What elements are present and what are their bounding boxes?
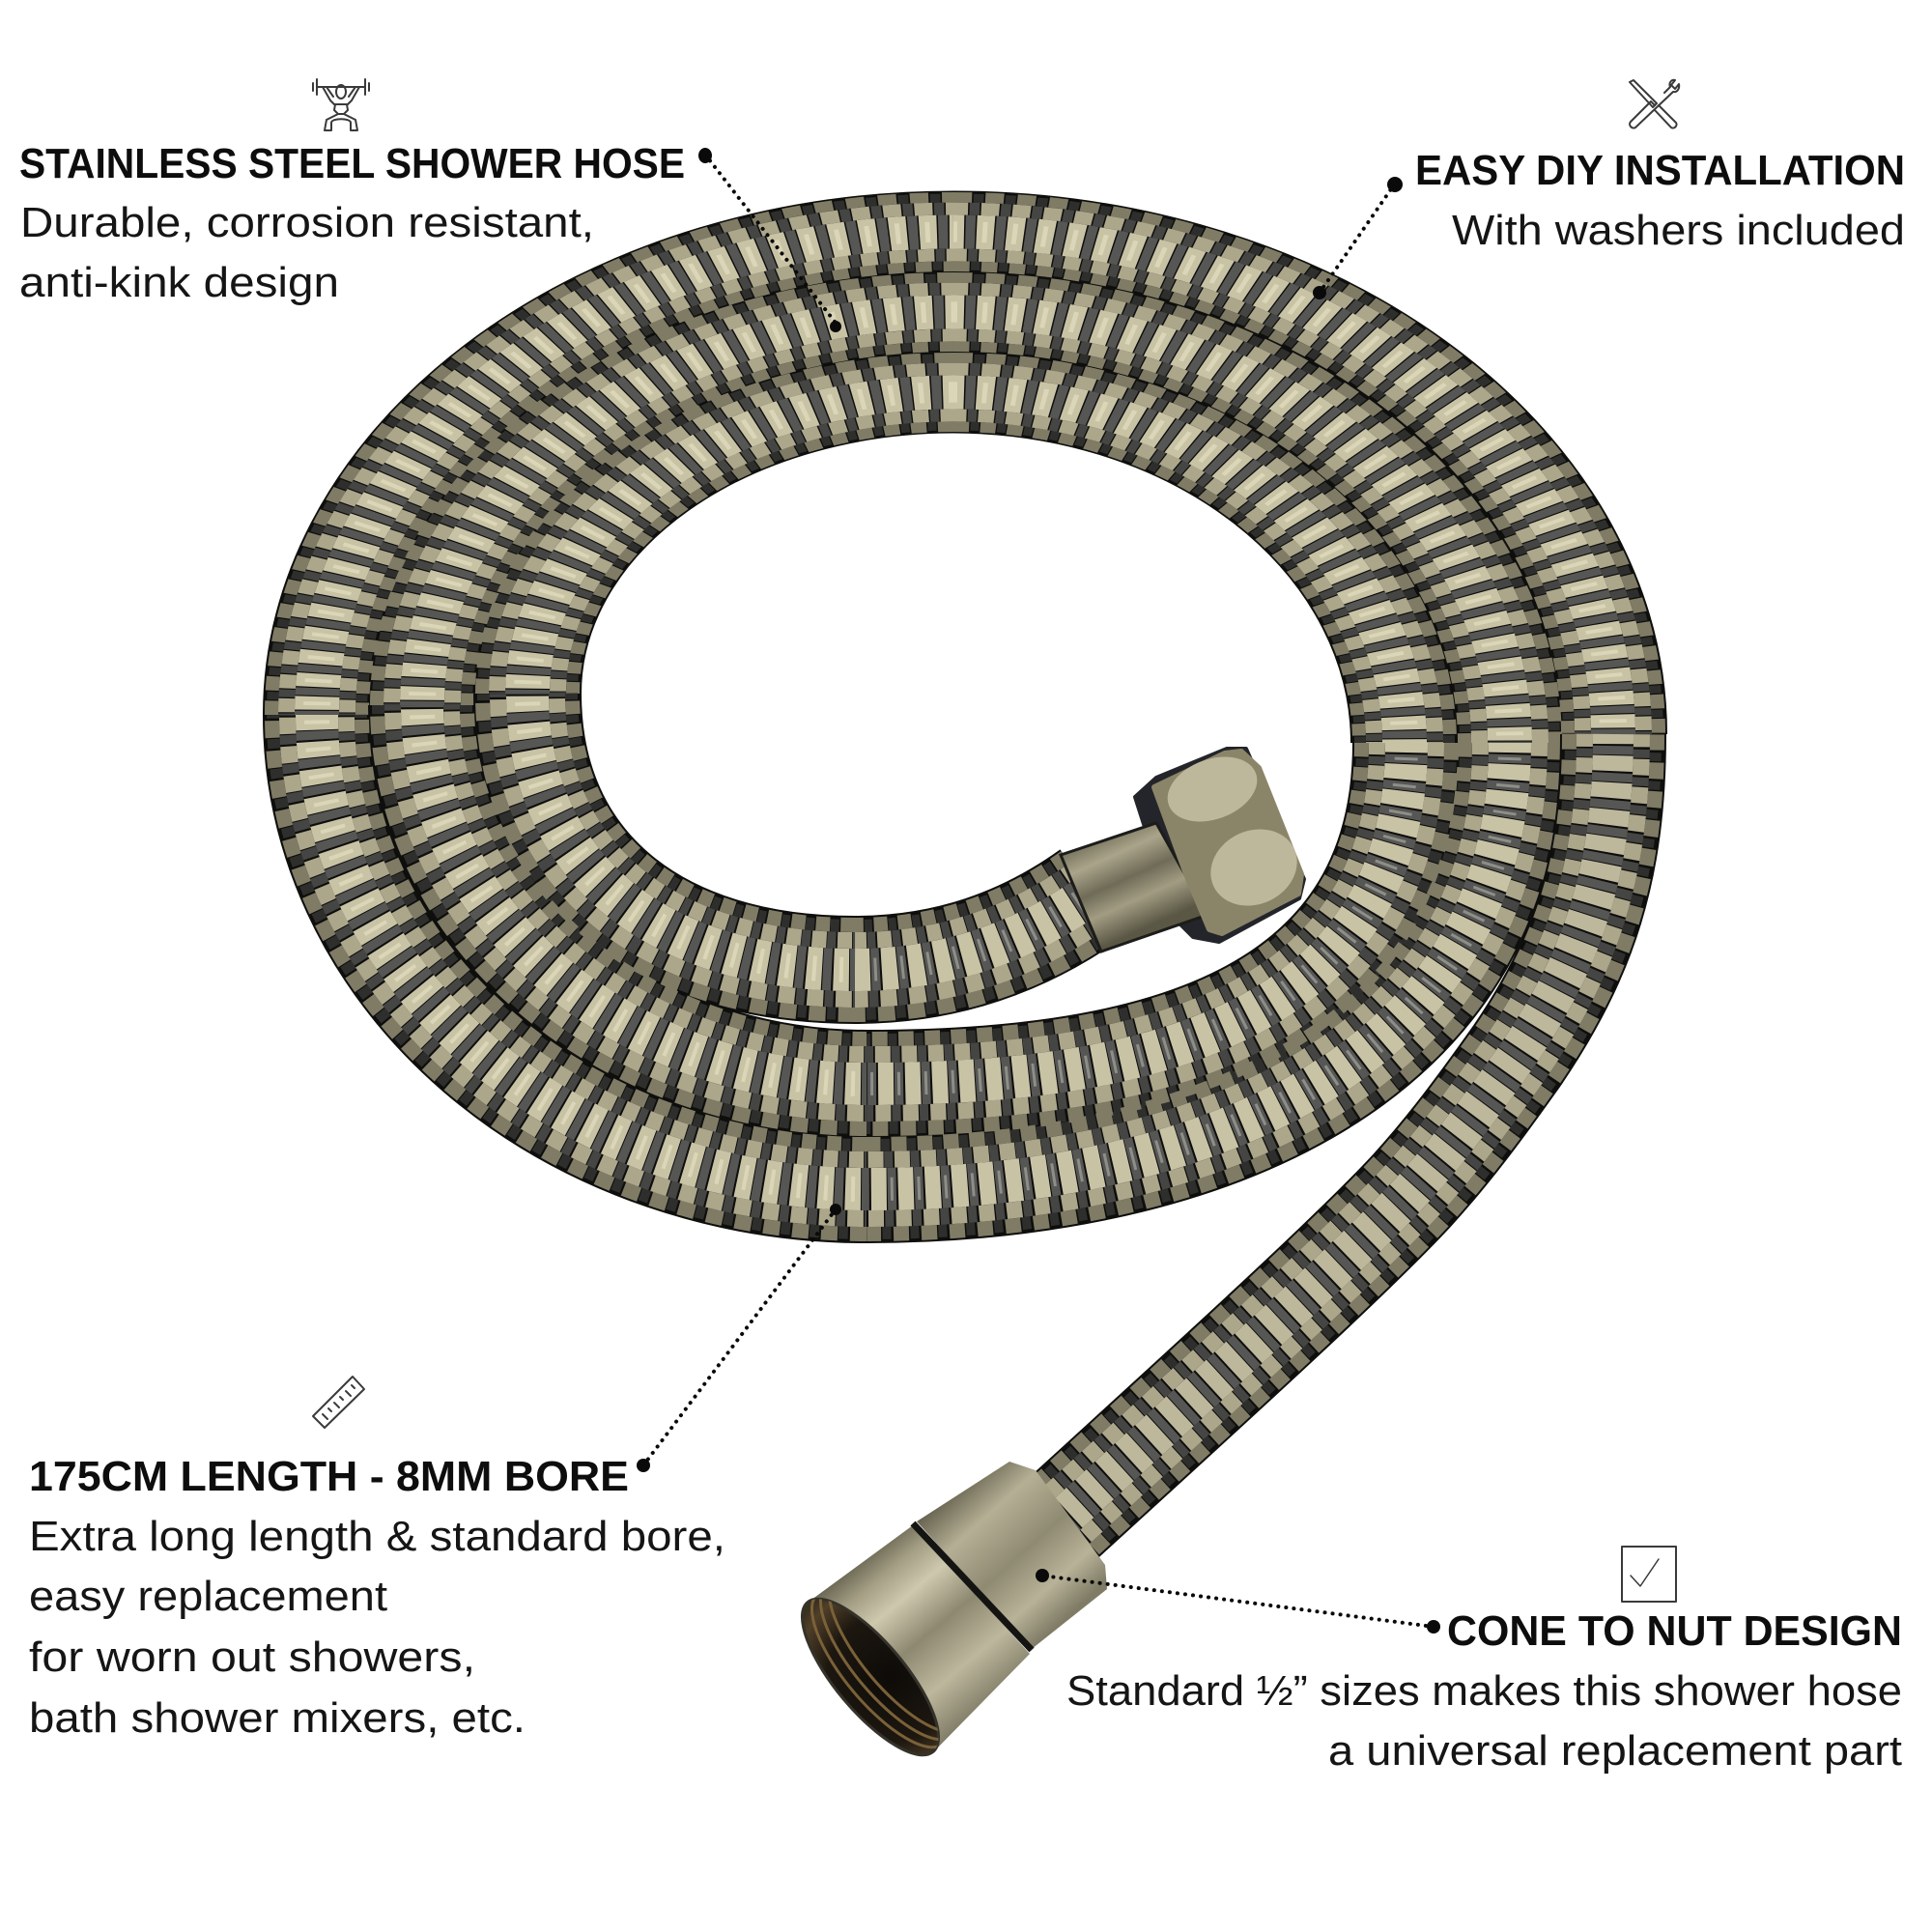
- description: easy replacement: [29, 1573, 387, 1620]
- nut body: [1154, 752, 1301, 933]
- description: [29, 1513, 725, 1742]
- icon: checkbox: [1622, 1547, 1676, 1602]
- heading: 175CM LENGTH - 8MM BORE: [29, 1453, 629, 1500]
- icon: crossed wrench and screwdriver: [1630, 80, 1679, 128]
- callout: cone to nut design: [1036, 1547, 1902, 1775]
- leader line: [637, 1204, 841, 1472]
- description: [19, 199, 594, 306]
- collar: [1061, 823, 1208, 952]
- description: Durable, corrosion resistant,: [20, 199, 594, 246]
- hose coil upper right: [953, 232, 1613, 743]
- leader line: [1313, 177, 1403, 299]
- heading: EASY DIY INSTALLATION: [1415, 147, 1905, 194]
- heading: STAINLESS STEEL SHOWER HOSE: [19, 140, 685, 187]
- description: Standard ½” sizes makes this shower hose: [1066, 1667, 1902, 1715]
- hose coil upper left: [317, 232, 953, 715]
- icon: ruler: [313, 1377, 364, 1428]
- leader line: [698, 148, 841, 332]
- threaded mouth: [800, 1598, 940, 1756]
- description: With washers included: [1452, 207, 1905, 254]
- description: bath shower mixers, etc.: [29, 1694, 526, 1742]
- leader line: [1036, 1569, 1440, 1634]
- callout: easy DIY installation: [1313, 80, 1905, 299]
- hex nut and collar at inner hose end: [1061, 745, 1310, 952]
- heading: CONE TO NUT DESIGN: [1447, 1607, 1902, 1655]
- fitting rear section: [917, 1462, 1107, 1649]
- description: a universal replacement part: [1328, 1727, 1902, 1775]
- hose tail running to the cone fitting: [1038, 734, 1613, 1541]
- description: Extra long length & standard bore,: [29, 1513, 725, 1560]
- nut facets: [1158, 745, 1266, 834]
- cone fitting at hose end: [800, 1462, 1107, 1756]
- description: anti-kink design: [19, 259, 339, 306]
- description: for worn out showers,: [29, 1634, 475, 1681]
- hose coil lower right: [855, 743, 1510, 1189]
- description: [1066, 1667, 1902, 1775]
- hose coil lower left: [317, 694, 867, 1189]
- nut dark back edge: [1135, 749, 1304, 942]
- fitting front section: [808, 1525, 1030, 1752]
- rubber ring: [913, 1523, 1032, 1650]
- icon: weightlifter: [313, 79, 369, 130]
- callout: length and bore: [29, 1204, 841, 1742]
- shower hose coil: [317, 232, 1613, 1541]
- callout: stainless steel shower hose: [19, 79, 841, 332]
